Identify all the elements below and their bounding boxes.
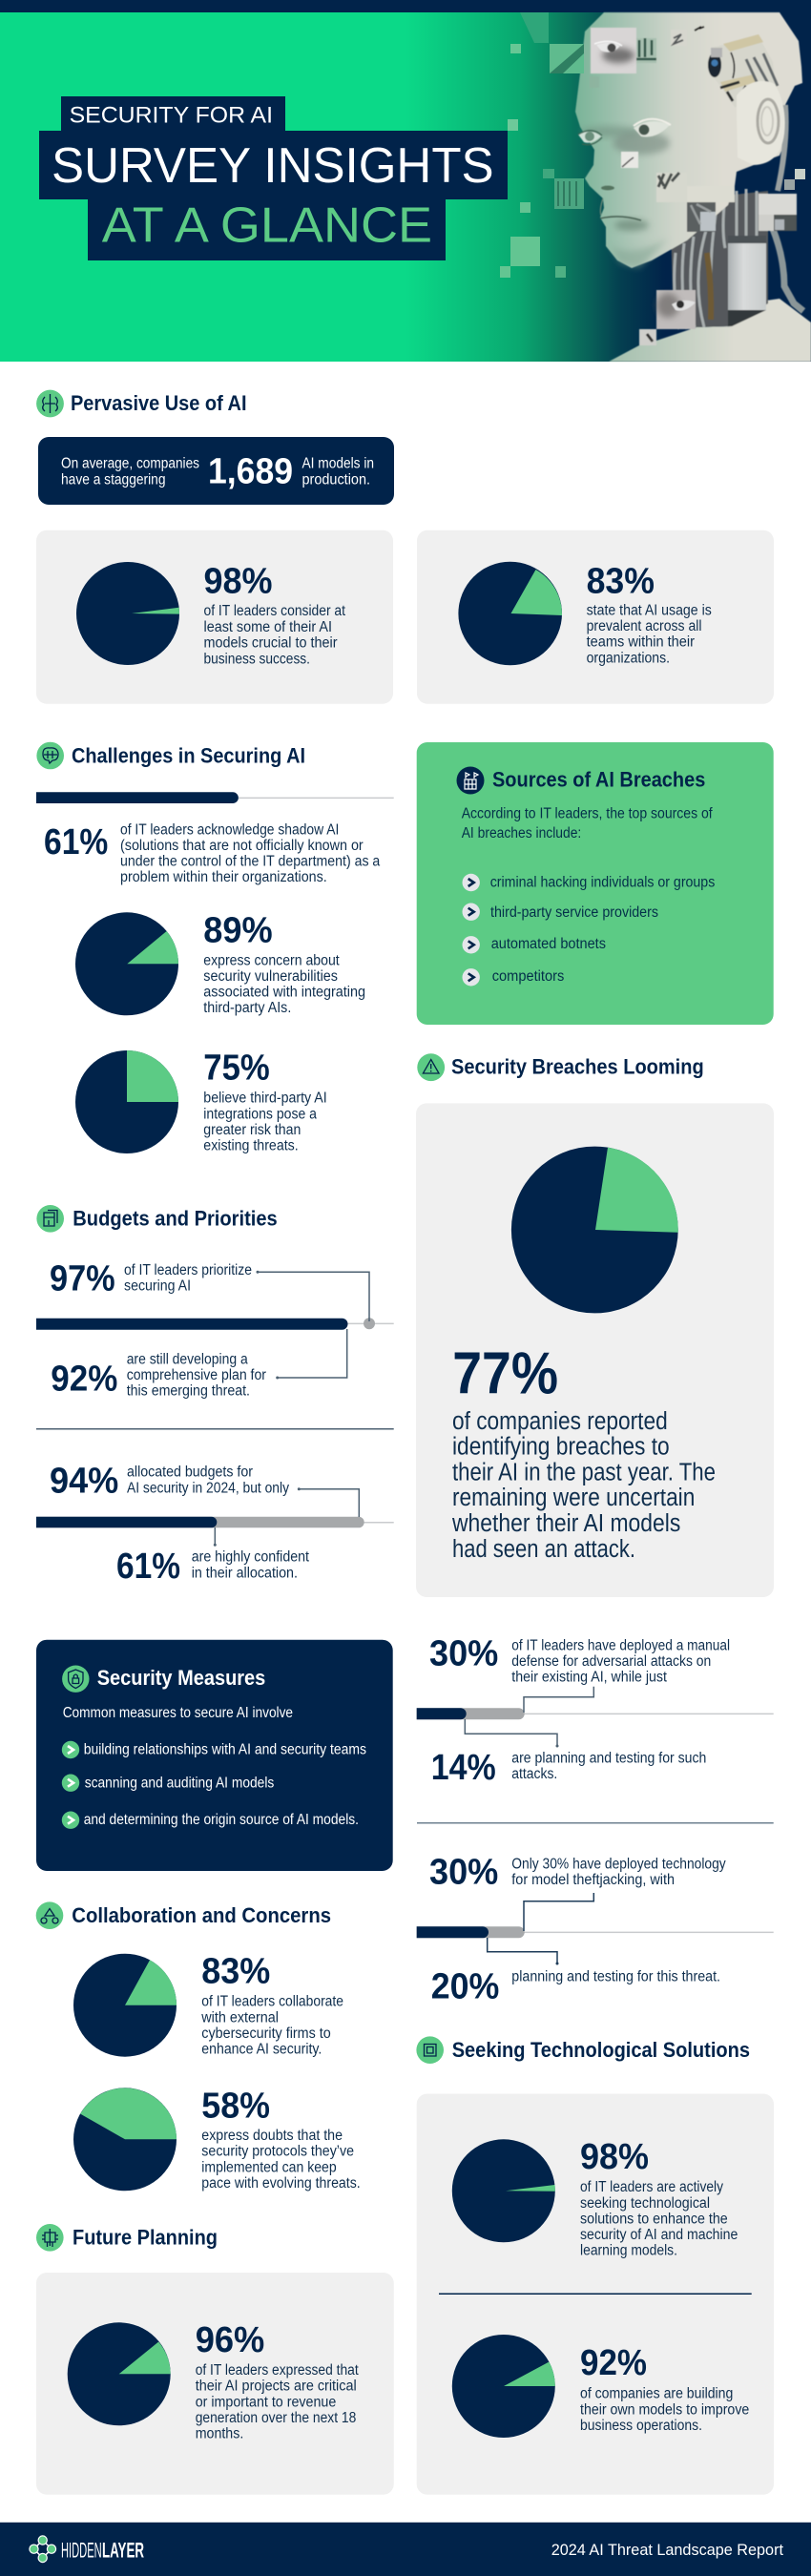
panel: Seeking Technological Solutions stats: learning models. <box>580 2243 677 2259</box>
callout: 1,689 AI models: On average, companies <box>61 456 199 472</box>
heading: Future Planning: Future Planning <box>73 2225 218 2249</box>
stat: 89% vulnerabilities: 89% <box>203 910 273 950</box>
panel: 96% revenue: their AI projects are critical <box>196 2379 357 2395</box>
panel: Seeking Technological Solutions stats: 98% <box>580 2137 649 2177</box>
stat: 94% and 61% allocation bar: allocated budgets for <box>127 1465 253 1481</box>
stat: 94% and 61% allocation bar <box>36 1461 394 1587</box>
callout: 1,689 AI models: production. <box>302 471 370 488</box>
stat: 58% doubts: express doubts that the <box>201 2128 343 2144</box>
pie chart 89% <box>75 912 178 1015</box>
stat: 94% and 61% allocation bar: in their allocation. <box>192 1565 298 1581</box>
heading: Challenges in Securing AI: Challenges in Securing AI <box>72 743 305 767</box>
stat: 89% vulnerabilities: security vulnerabilities <box>203 968 338 985</box>
stat: 61% shadow AI: under the control of the IT department) as a <box>120 853 381 869</box>
panel: 83% usage prevalent: state that AI usage is <box>587 602 712 618</box>
panel: Sources of AI Breaches: AI breaches include: <box>462 825 581 841</box>
footer <box>0 2523 811 2576</box>
logo: HiddenLayer: LAYER <box>102 2538 144 2562</box>
bullet list: third-party service providers <box>490 904 658 921</box>
stat: 97% and 92% budget bar: 97% <box>50 1259 115 1299</box>
pie chart 96% <box>68 2322 171 2425</box>
stat: 30% and 14% adversarial defense bar: defense for adversarial attacks on <box>511 1653 711 1670</box>
callout: 1,689 AI models: have a staggering <box>61 471 166 488</box>
panel: 98% crucial models: of IT leaders consider at <box>204 603 346 619</box>
stat: 75% third-party risk: believe third-party AI <box>203 1091 327 1107</box>
heading: Seeking Technological Solutions: Seeking Technological Solutions <box>452 2038 750 2062</box>
heading: Security Breaches Looming <box>417 1053 704 1081</box>
stat: 83% collaborate: 83% <box>201 1951 270 1991</box>
stat: 30% and 14% adversarial defense bar: attacks. <box>511 1766 557 1782</box>
panel: 96% revenue: of IT leaders expressed that <box>196 2362 359 2379</box>
panel: Sources of AI Breaches: Sources of AI Breaches <box>492 768 705 792</box>
logo: HiddenLayer <box>30 2536 144 2563</box>
stat: 30% and 20% theftjacking bar: 30% <box>429 1853 498 1893</box>
stat: 58% doubts: implemented can keep <box>201 2159 337 2175</box>
stat: 83% collaborate: with external <box>200 2009 279 2025</box>
panel: 96% revenue: or important to revenue <box>196 2394 336 2410</box>
stat: 61% shadow AI: 61% <box>44 822 108 862</box>
stat: 30% and 20% theftjacking bar <box>417 1853 774 2006</box>
heading: Security Breaches Looming: Security Breaches Looming <box>451 1055 704 1079</box>
panel: 77% breaches: their AI in the past year. The <box>452 1459 716 1485</box>
panel: Sources of AI Breaches <box>417 742 774 1025</box>
bullet list: competitors <box>492 968 565 985</box>
stat: 89% vulnerabilities: associated with integrating <box>203 984 365 1000</box>
stat: 97% and 92% budget bar: of IT leaders prioritize <box>124 1262 252 1278</box>
stat: 30% and 14% adversarial defense bar: 14% <box>431 1748 496 1788</box>
panel: 83% usage prevalent: teams within their <box>587 634 695 651</box>
panel: 83% usage prevalent: prevalent across all <box>587 618 702 634</box>
bullet list: scanning and auditing AI models <box>85 1775 275 1791</box>
stat: 97% and 92% budget bar: comprehensive plan for <box>127 1367 266 1383</box>
bullet list: automated botnets <box>491 936 606 952</box>
stat: 30% and 14% adversarial defense bar: their existing AI, while just <box>511 1670 668 1686</box>
panel: 77% breaches <box>416 1103 774 1597</box>
panel: Seeking Technological Solutions stats: solutions to enhance the <box>580 2211 728 2227</box>
upper mechanical detail <box>708 34 778 107</box>
title: AT A GLANCE <box>102 197 432 253</box>
bullet list: building relationships with AI and security teams <box>84 1741 366 1757</box>
panel: 96% revenue: generation over the next 18 <box>196 2410 356 2426</box>
stat: 97% and 92% budget bar: securing AI <box>124 1278 191 1295</box>
callout: 1,689 AI models <box>38 437 394 505</box>
stat: 75% third-party risk: 75% <box>203 1049 270 1089</box>
panel: 98% crucial models: models crucial to their <box>204 635 338 652</box>
stat: 94% and 61% allocation bar: 61% <box>116 1547 180 1587</box>
stat: 83% collaborate: of IT leaders collaborate <box>201 1994 343 2010</box>
stat: 30% and 14% adversarial defense bar <box>417 1634 774 1788</box>
panel: 96% revenue <box>36 2273 394 2495</box>
stat: 94% and 61% allocation bar: AI security in 2024, but only <box>127 1480 289 1496</box>
stat: 58% doubts: 58% <box>201 2086 270 2126</box>
panel: Seeking Technological Solutions stats: security of AI and machine <box>580 2227 738 2243</box>
stat: 94% and 61% allocation bar: 94% <box>50 1461 118 1501</box>
heading: Budgets and Priorities <box>36 1205 278 1233</box>
heading: Budgets and Priorities: Budgets and Priorities <box>73 1206 278 1230</box>
stat: 94% and 61% allocation bar: are highly confident <box>192 1549 310 1566</box>
panel: 83% usage prevalent <box>417 530 774 704</box>
panel: Seeking Technological Solutions stats: their own models to improve <box>580 2402 749 2418</box>
pie chart 98% <box>452 2139 555 2242</box>
image tiles <box>590 28 797 345</box>
heading: Pervasive Use of AI <box>36 390 246 417</box>
stat: 97% and 92% budget bar: this emerging threat. <box>127 1383 250 1400</box>
panel: Seeking Technological Solutions stats: 92% <box>580 2343 647 2383</box>
decorative pixel squares <box>500 12 805 278</box>
pie chart 58% <box>73 2088 177 2191</box>
panel: 77% breaches: 77% <box>452 1340 558 1406</box>
stat: 30% and 20% theftjacking bar: Only 30% have deployed technology <box>511 1856 726 1872</box>
stat: 89% vulnerabilities: third-party AIs. <box>203 1000 291 1016</box>
panel: Security Measures: Security Measures <box>97 1666 265 1690</box>
panel: Seeking Technological Solutions stats: of companies are building <box>580 2386 733 2402</box>
stat: 75% third-party risk <box>75 1049 327 1154</box>
stat: 61% shadow AI: (solutions that are not officially known or <box>120 838 364 854</box>
panel: Seeking Technological Solutions stats: business operations. <box>580 2418 702 2434</box>
stat: 61% shadow AI: of IT leaders acknowledge shadow AI <box>120 821 339 838</box>
title: SECURITY FOR AI <box>70 102 273 128</box>
panel: Sources of AI Breaches: According to IT leaders, the top sources of <box>462 805 713 821</box>
stat: 75% third-party risk: integrations pose a <box>203 1106 317 1122</box>
callout: 1,689 AI models: 1,689 <box>208 452 293 492</box>
bullet list <box>62 1741 366 1829</box>
pie chart 77% <box>511 1147 678 1313</box>
panel: Seeking Technological Solutions stats <box>417 2093 774 2495</box>
panel: Security Measures <box>36 1640 393 1871</box>
panel: 77% breaches: remaining were uncertain <box>452 1485 695 1511</box>
footer: 2024 AI Threat Landscape Report <box>551 2541 783 2559</box>
logo: HiddenLayer: HIDDEN <box>61 2538 102 2562</box>
bullet list <box>462 874 716 987</box>
panel: 83% usage prevalent: 83% <box>587 562 655 602</box>
panel: 98% crucial models <box>36 530 393 704</box>
heading: Collaboration and Concerns: Collaboration and Concerns <box>72 1903 331 1927</box>
stat: 30% and 14% adversarial defense bar: are planning and testing for such <box>511 1750 706 1766</box>
panel: 77% breaches: whether their AI models <box>451 1510 680 1537</box>
panel: 83% usage prevalent: organizations. <box>587 650 670 666</box>
stat: 58% doubts: pace with evolving threats. <box>201 2175 361 2192</box>
stat: 30% and 14% adversarial defense bar: 30% <box>429 1634 498 1674</box>
title <box>39 96 508 260</box>
stat: 61% shadow AI: problem within their organizations. <box>120 869 327 885</box>
bullet list: criminal hacking individuals or groups <box>490 874 716 890</box>
panel: Seeking Technological Solutions stats: seeking technological <box>580 2195 710 2212</box>
stat: 83% collaborate: enhance AI security. <box>201 2042 322 2058</box>
heading: Pervasive Use of AI: Pervasive Use of AI <box>71 391 246 415</box>
pie chart 92% <box>452 2335 555 2438</box>
panel: 98% crucial models: 98% <box>204 562 273 602</box>
pie chart 75% <box>75 1050 178 1153</box>
icon: shield lock <box>62 1666 90 1693</box>
stat: 58% doubts <box>73 2086 361 2192</box>
robot head illustration <box>575 12 811 362</box>
stat: 30% and 20% theftjacking bar: for model theftjacking, with <box>511 1872 675 1888</box>
heading: Challenges in Securing AI <box>36 742 305 769</box>
stat: 61% shadow AI <box>44 821 381 885</box>
icon: factory <box>456 767 485 794</box>
hero banner <box>0 0 811 362</box>
bullet list: and determining the origin source of AI models. <box>84 1812 359 1828</box>
stat: 89% vulnerabilities: express concern about <box>203 952 340 968</box>
panel: Security Measures: Common measures to secure AI involve <box>63 1705 293 1721</box>
stat: 89% vulnerabilities <box>75 910 365 1016</box>
stat: 75% third-party risk: existing threats. <box>203 1138 299 1154</box>
stat: 97% and 92% budget bar: are still developing a <box>127 1351 248 1367</box>
stat: 30% and 14% adversarial defense bar: of IT leaders have deployed a manual <box>511 1637 730 1653</box>
ear <box>737 81 785 165</box>
stat: 75% third-party risk: greater risk than <box>203 1122 301 1138</box>
pie chart 98% <box>76 562 179 665</box>
head and face <box>575 12 802 268</box>
panel: 96% revenue: months. <box>196 2426 243 2442</box>
pie chart 83% <box>458 562 562 665</box>
stat: 97% and 92% budget bar: 92% <box>51 1359 117 1399</box>
panel: 77% breaches: of companies reported <box>452 1408 668 1435</box>
stat: 97% and 92% budget bar <box>36 1259 394 1400</box>
heading: Future Planning <box>36 2224 218 2252</box>
stat: 30% and 20% theftjacking bar: 20% <box>431 1966 499 2006</box>
stat: 83% collaborate: cybersecurity firms to <box>201 2025 331 2042</box>
panel: 98% crucial models: business success. <box>204 651 310 667</box>
pie chart 83% <box>73 1954 177 2057</box>
callout: 1,689 AI models: AI models in <box>302 456 374 472</box>
stat: 30% and 20% theftjacking bar: planning and testing for this threat. <box>511 1969 720 1985</box>
panel: 98% crucial models: least some of their AI <box>204 619 332 635</box>
stat: 83% collaborate <box>73 1951 343 2058</box>
panel: 96% revenue: 96% <box>196 2320 264 2360</box>
panel: Seeking Technological Solutions stats: of IT leaders are actively <box>580 2179 723 2195</box>
stat: 58% doubts: security protocols they’ve <box>201 2144 354 2160</box>
panel: 77% breaches: identifying breaches to <box>452 1434 670 1461</box>
panel: 77% breaches: had seen an attack. <box>452 1536 635 1563</box>
title: SURVEY INSIGHTS <box>52 138 494 194</box>
progress bar: 61% shadow AI <box>36 792 394 803</box>
